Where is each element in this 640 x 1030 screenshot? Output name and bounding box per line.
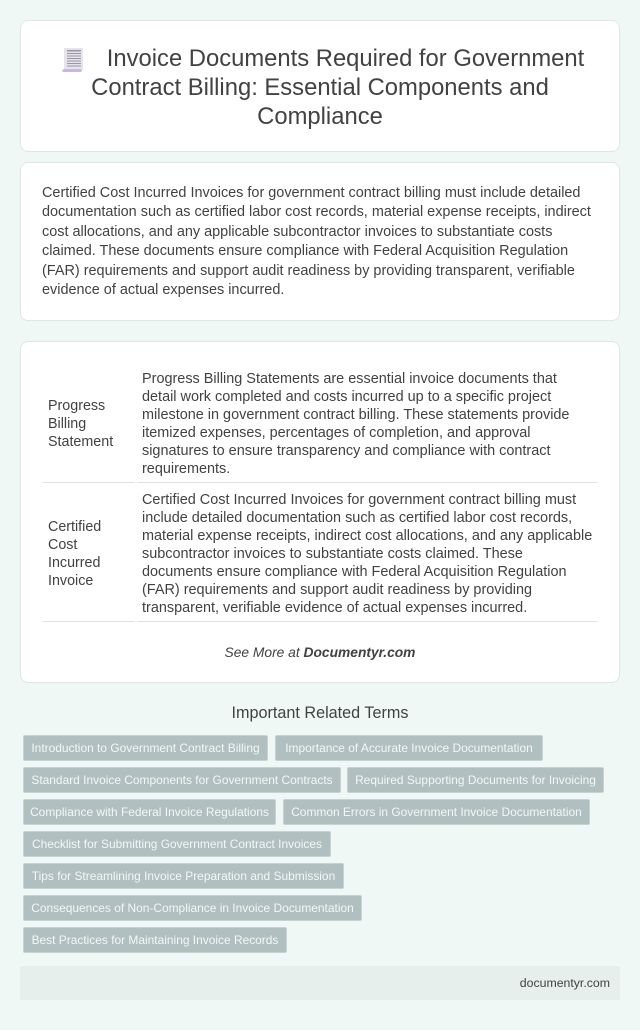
summary text: documentation such as certified labor cost records, material expense receipts, indirect [42, 204, 591, 220]
related terms tags [23, 735, 604, 953]
tag [23, 895, 362, 921]
tag: Required Supporting Documents for Invoicing [355, 773, 596, 787]
row text: Progress Billing Statement: itemized expenses, percentages of completion, and approval [142, 425, 530, 441]
tag: Best Practices for Maintaining Invoice Records [32, 933, 278, 947]
tag: Importance of Accurate Invoice Documentation [285, 741, 533, 755]
row label: Progress Billing Statement: Statement [48, 434, 113, 450]
tag: Compliance with Federal Invoice Regulations [30, 805, 269, 819]
row text: Progress Billing Statement: Progress Billing Statements are essential invoice documents that [142, 371, 557, 387]
row text: Certified Cost Incurred Invoice: Certified Cost Incurred Invoices for government contract billing must [142, 492, 576, 508]
tag: Consequences of Non-Compliance in Invoice Documentation [31, 901, 354, 915]
tag [23, 831, 331, 857]
row text: Certified Cost Incurred Invoice: transparent, verifiable evidence of actual expenses incurred. [142, 600, 527, 616]
row text: Progress Billing Statement: requirements. [142, 461, 230, 477]
row label: Certified Cost Incurred Invoice: Cost [48, 537, 77, 553]
row label: Progress Billing Statement: Billing [48, 416, 86, 432]
row label: Certified Cost Incurred Invoice: Invoice [48, 573, 93, 589]
row label: Progress Billing Statement [48, 398, 114, 450]
panel: document table card [20, 341, 620, 683]
row text: Certified Cost Incurred Invoice [142, 492, 592, 616]
row text: Progress Billing Statement: detail work completed and costs incurred up to a specific project [142, 389, 551, 405]
tag [23, 863, 344, 889]
row text: Certified Cost Incurred Invoice: material expense receipts, indirect cost allocations, and any applicable [142, 528, 592, 544]
footer domain: documentyr.com [520, 976, 610, 990]
panel: title card [20, 20, 620, 152]
row text: Certified Cost Incurred Invoice: subcontractor invoices to substantiate costs claimed. These [142, 546, 523, 562]
row text: Certified Cost Incurred Invoice: (FAR) requirements and support audit readiness by providing [142, 582, 532, 598]
panel: summary card [20, 162, 620, 321]
summary text: cost allocations, and any applicable subcontractor invoices to substantiate costs [42, 224, 552, 240]
title: Compliance [257, 103, 383, 130]
row label: Certified Cost Incurred Invoice [48, 519, 101, 589]
row label: Certified Cost Incurred Invoice: Certified [48, 519, 101, 535]
row text: Progress Billing Statement: milestone in government contract billing. These statements provide [142, 407, 569, 423]
row text: Progress Billing Statement [142, 371, 569, 477]
title: Invoice Documents Required for Government [107, 45, 584, 72]
icon: invoice receipt [62, 48, 83, 72]
summary text: (FAR) requirements and support audit readiness by providing transparent, verifiable [42, 263, 575, 279]
tag [275, 735, 543, 761]
tag: Standard Invoice Components for Government Contracts [31, 773, 333, 787]
tag [347, 767, 604, 793]
summary text: Certified Cost Incurred Invoices for government contract billing must include detailed [42, 185, 580, 201]
tag [23, 767, 341, 793]
summary text: evidence of actual expenses incurred. [42, 282, 284, 298]
tag: Common Errors in Government Invoice Documentation [291, 805, 582, 819]
row text: Certified Cost Incurred Invoice: include detailed documentation such as certified labor cost records, [142, 510, 572, 526]
title [91, 45, 584, 130]
tag: Introduction to Government Contract Billing [31, 741, 260, 755]
tag [23, 927, 287, 953]
tag: Tips for Streamlining Invoice Preparation and Submission [32, 869, 335, 883]
tag: Checklist for Submitting Government Contract Invoices [32, 837, 322, 851]
row text: Certified Cost Incurred Invoice: documents ensure compliance with Federal Acquisition Regulation [142, 564, 567, 580]
tag [283, 799, 590, 825]
footer bar [20, 966, 620, 1000]
see more link: See More at Documentyr.com [225, 645, 415, 660]
tag [23, 735, 268, 761]
summary text: claimed. These documents ensure compliance with Federal Acquisition Regulation [42, 243, 568, 259]
summary text [42, 185, 591, 298]
row text: Progress Billing Statement: signatures to ensure transparency and compliance with contract [142, 443, 550, 459]
title: Contract Billing: Essential Components and [91, 74, 549, 101]
tag [23, 799, 276, 825]
row label: Certified Cost Incurred Invoice: Incurred [48, 555, 100, 571]
heading: related terms: Important Related Terms [232, 704, 408, 722]
row label: Progress Billing Statement: Progress [48, 398, 105, 414]
